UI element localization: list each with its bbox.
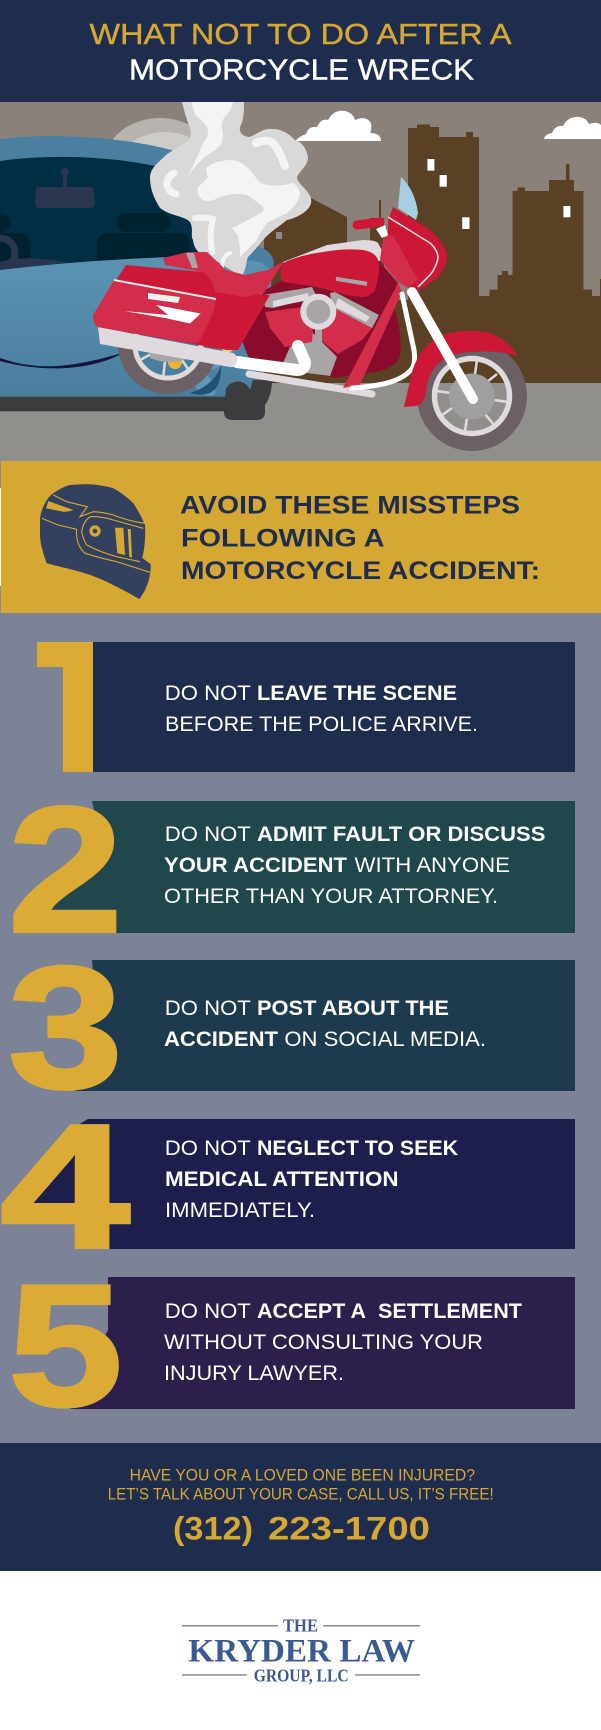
logo: The Kryder Law Group, LLC: THE — [283, 1616, 318, 1636]
exhaust pipe — [237, 346, 305, 370]
icon: motorcycle helmet — [40, 484, 151, 599]
smoke plume — [150, 102, 311, 276]
footer call to action: LET’S TALK ABOUT YOUR CASE, CALL US, IT’S FREE! — [108, 1486, 494, 1504]
heading: AVOID THESE MISSTEPS — [180, 492, 520, 520]
step 5 text — [164, 1300, 522, 1385]
step 3 text: POST ABOUT THE — [257, 997, 449, 1020]
engine crankcase — [283, 333, 337, 376]
step 2 text: DO NOT — [165, 823, 251, 846]
heading — [180, 492, 540, 585]
step 4 text: IMMEDIATELY. — [165, 1199, 315, 1222]
step 4 card — [0, 1087, 575, 1285]
fuel tank — [280, 240, 387, 297]
logo: The Kryder Law Group, LLC: GROUP, LLC — [254, 1666, 349, 1686]
number 5: 5 — [8, 1249, 123, 1443]
side bag bottom trim — [98, 327, 237, 367]
city skyline — [264, 124, 601, 383]
heading: MOTORCYCLE ACCIDENT: — [181, 557, 540, 585]
footer call to action: HAVE YOU OR A LOVED ONE BEEN INJURED? — [130, 1467, 475, 1485]
frame tube — [343, 283, 402, 388]
banner: avoid these missteps — [0, 461, 601, 613]
step 4 text: MEDICAL ATTENTION — [165, 1168, 399, 1191]
step 1 card — [37, 642, 575, 772]
title banner: WHAT NOT TO DO AFTER A — [90, 19, 512, 51]
step 3 text: ON SOCIAL MEDIA. — [284, 1028, 486, 1051]
step 3 text: DO NOT — [165, 997, 251, 1020]
step 5 text: WITHOUT CONSULTING YOUR — [164, 1331, 483, 1354]
title banner: MOTORCYCLE WRECK — [129, 54, 474, 86]
step 5 card — [8, 1249, 575, 1443]
step 1 text: LEAVE THE SCENE — [257, 682, 457, 705]
side bag — [93, 265, 270, 350]
smoke rings behind car — [105, 118, 215, 206]
logo: The Kryder Law Group, LLC: KRYDER LAW — [188, 1634, 415, 1670]
step 5 text: SETTLEMENT — [378, 1300, 522, 1323]
step 2 text: WITH ANYONE — [354, 854, 510, 877]
step 4 text — [165, 1137, 458, 1222]
number 1: 1 — [30, 617, 126, 809]
title banner — [0, 0, 601, 102]
motorcycle — [93, 177, 527, 451]
phone number: (312) — [173, 1510, 253, 1546]
engine cylinders — [263, 287, 379, 354]
seat — [163, 252, 284, 297]
front fork — [412, 292, 473, 399]
step 2 text: ADMIT FAULT OR DISCUSS — [257, 823, 545, 846]
step 4 text: DO NOT — [165, 1137, 251, 1160]
front fender — [404, 331, 518, 407]
footer call to action — [0, 1443, 601, 1571]
car — [0, 136, 274, 420]
engine body — [241, 262, 401, 378]
step 3 text — [164, 997, 486, 1051]
phone number: 223-1700 — [268, 1510, 430, 1546]
illustration: crashed motorcycle and car — [0, 102, 601, 461]
step 4 text: NEGLECT TO SEEK — [257, 1137, 458, 1160]
number 1 — [37, 642, 93, 772]
step 5 text: DO NOT — [165, 1300, 251, 1323]
logo: The Kryder Law Group, LLC — [182, 1616, 420, 1686]
phone number — [173, 1510, 430, 1546]
step 2 text: YOUR ACCIDENT — [164, 854, 347, 877]
front wheel — [417, 341, 527, 451]
sky and road — [0, 102, 601, 461]
clouds — [295, 111, 601, 141]
step 1 text — [165, 682, 478, 736]
step 3 card — [8, 931, 575, 1125]
step 5 text: INJURY LAWYER. — [164, 1362, 344, 1385]
rear wheel — [118, 294, 218, 394]
step 2 text — [164, 823, 545, 908]
number 3: 3 — [8, 931, 123, 1125]
step 2 text: OTHER THAN YOUR ATTORNEY. — [164, 885, 498, 908]
step 1 text: DO NOT — [165, 682, 251, 705]
lower bar — [249, 374, 372, 394]
number 2: 2 — [8, 769, 123, 969]
fairing — [380, 207, 447, 291]
front frame bar — [352, 294, 415, 388]
step 3 text: ACCIDENT — [164, 1028, 278, 1051]
handlebar — [357, 222, 388, 238]
step 2 card — [8, 769, 575, 969]
step 1 text: BEFORE THE POLICE ARRIVE. — [165, 713, 478, 736]
number 4: 4 — [0, 1087, 130, 1285]
fairing windshield — [398, 177, 418, 220]
heading: FOLLOWING A — [181, 524, 384, 552]
step 5 text: ACCEPT A — [257, 1300, 366, 1323]
